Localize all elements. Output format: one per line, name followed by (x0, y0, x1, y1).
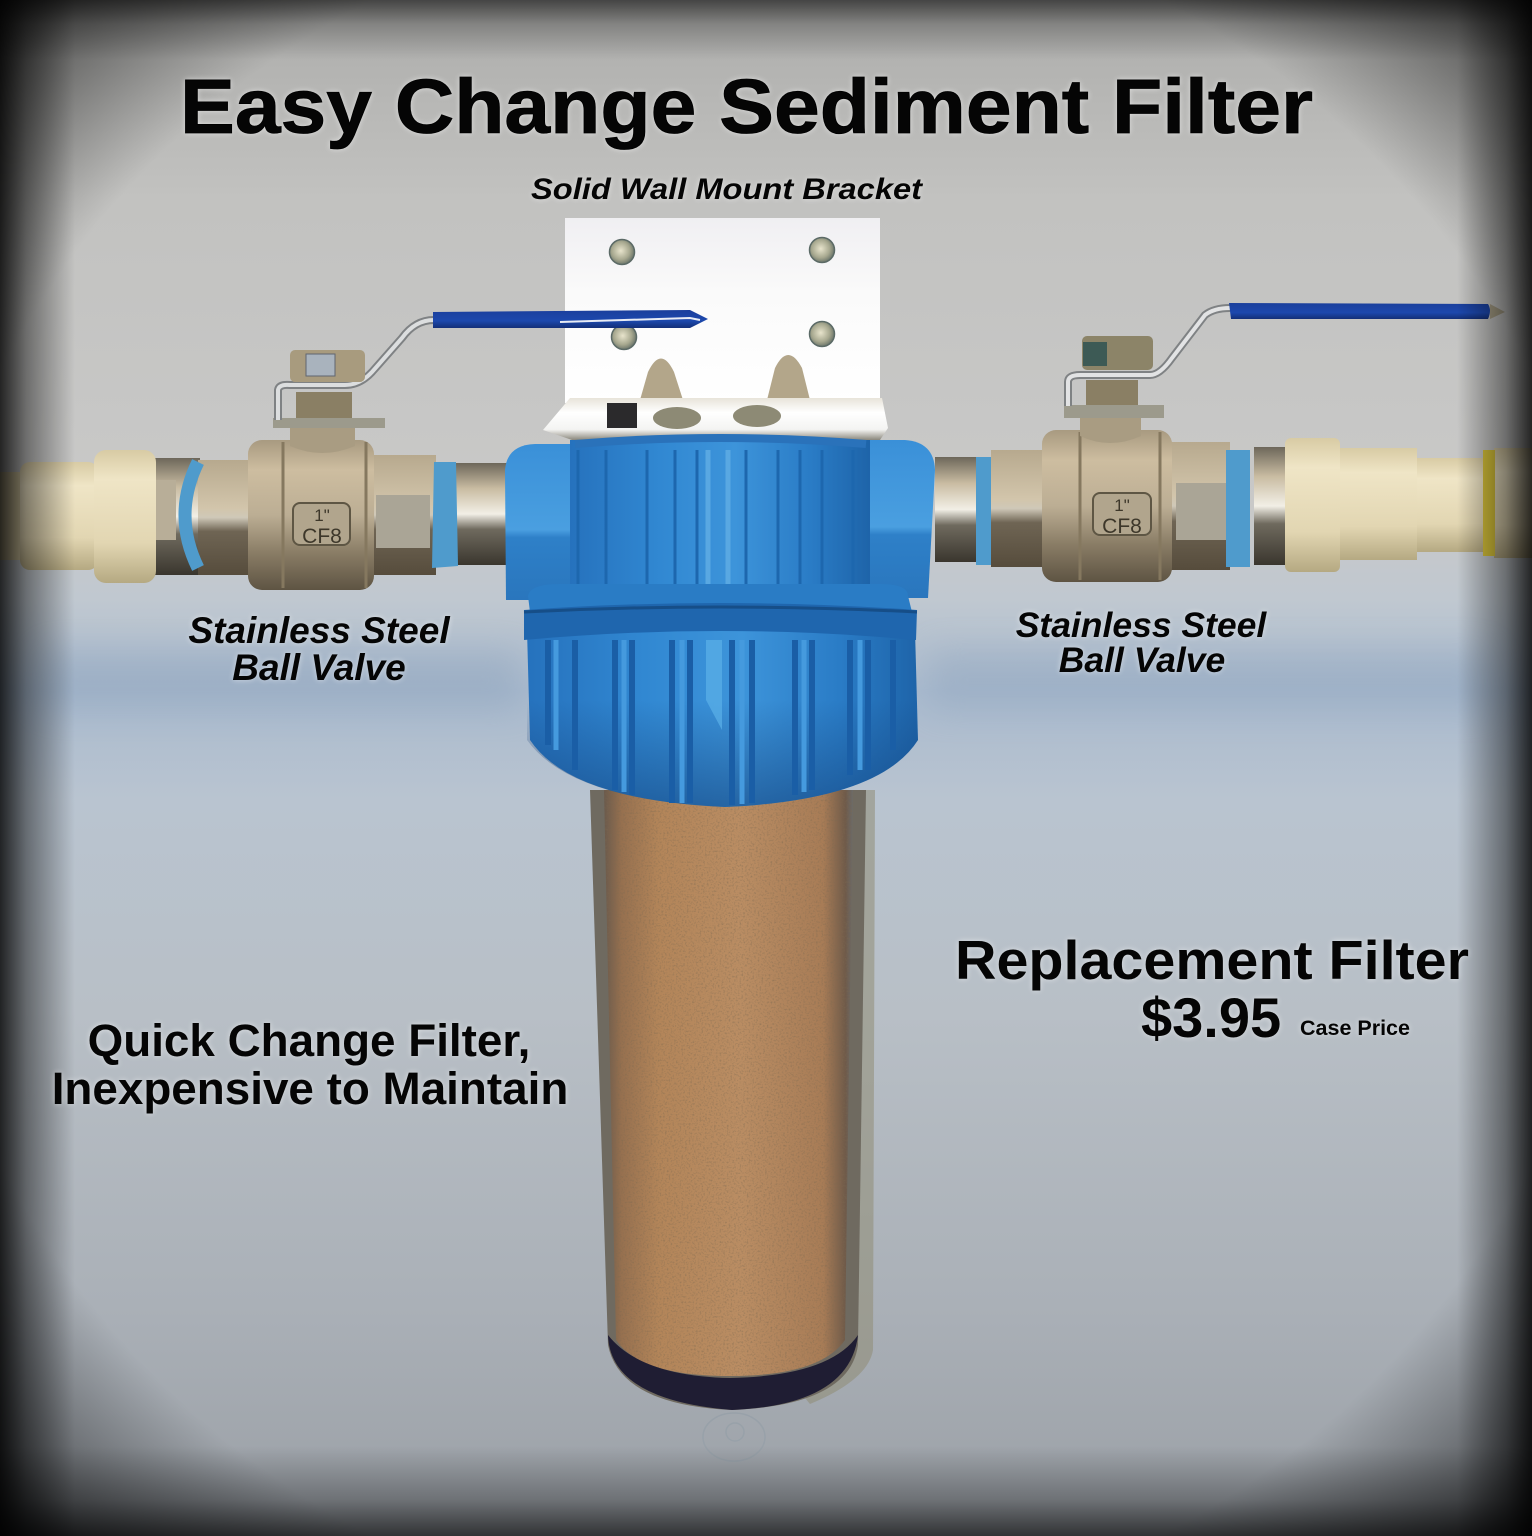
wall shadow band right (930, 650, 1490, 710)
label: left ball valve: Ball Valve (232, 647, 406, 688)
right ball valve: CF8 (1102, 515, 1142, 538)
valve marking: 1" (314, 506, 330, 525)
title: Easy Change Sediment Filter (180, 64, 1313, 150)
left ball valve (185, 320, 508, 590)
callout: replacement filter price: Case Price (1300, 1016, 1410, 1040)
callout: quick change filter: Quick Change Filter, (88, 1015, 530, 1066)
filter bowl and cartridge (590, 790, 875, 1410)
right ball valve (935, 303, 1505, 582)
callout: quick change filter (52, 1015, 568, 1114)
label: right ball valve: Stainless Steel (1016, 605, 1267, 645)
label: right ball valve (1016, 605, 1267, 680)
callout: replacement filter price (955, 929, 1469, 1049)
wall anchor ring (703, 1413, 765, 1461)
filter head (505, 438, 935, 807)
label: right ball valve: Ball Valve (1059, 640, 1225, 680)
right valve blue handle (1229, 303, 1490, 319)
label: left ball valve: Stainless Steel (188, 610, 450, 651)
label: wall mount bracket: Solid Wall Mount Bracket (531, 173, 924, 206)
callout: quick change filter: Inexpensive to Maintain (52, 1063, 568, 1114)
bracket screws (610, 238, 834, 350)
right pipe (1254, 438, 1532, 572)
callout: replacement filter price: $3.95 (1141, 986, 1281, 1049)
left ball valve: CF8 (302, 525, 342, 548)
filter collar (527, 630, 918, 807)
wall mount bracket (543, 218, 888, 440)
callout: replacement filter price: Replacement Filter (955, 929, 1469, 991)
valve marking: 1" (1114, 496, 1130, 515)
wall shadow band left (40, 650, 520, 710)
label: left ball valve (188, 610, 450, 688)
left valve blue handle (433, 310, 708, 328)
left pipe (0, 450, 200, 583)
